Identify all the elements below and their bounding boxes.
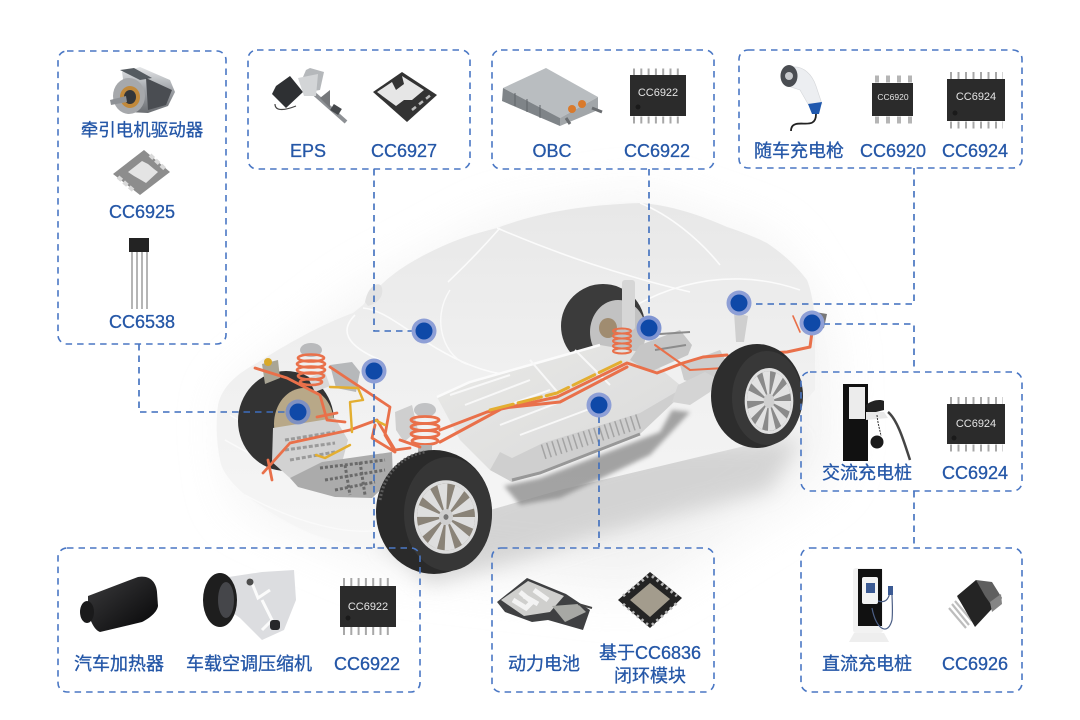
front coil spring right bbox=[411, 403, 439, 453]
icon: CC6920 chip bbox=[872, 79, 913, 120]
label: battery: 动力电池 bbox=[508, 654, 580, 674]
panel: charging gun bbox=[739, 50, 1022, 168]
chip text: CC6924 bbox=[956, 91, 996, 103]
far rear wheel bbox=[561, 284, 646, 368]
marker dots bbox=[286, 290, 824, 424]
near rear wheel bbox=[711, 344, 803, 448]
icon: battery module bbox=[497, 578, 592, 630]
label: CC6922: CC6922 bbox=[624, 141, 690, 161]
label: CC6924: CC6924 bbox=[942, 141, 1008, 161]
connector lines bbox=[139, 168, 914, 548]
icon: OBC box bbox=[502, 68, 602, 126]
label: CC6836 module: 基于CC6836 bbox=[599, 643, 701, 663]
icon: CC6925 package bbox=[113, 150, 170, 195]
label: CC6922: CC6922 bbox=[334, 654, 400, 674]
marker: compressor bbox=[362, 358, 386, 384]
panel: DC charger bbox=[801, 548, 1022, 692]
label: CC6920: CC6920 bbox=[860, 141, 926, 161]
label: AC charger: 交流充电桩 bbox=[822, 463, 912, 483]
rear subframe and motor bbox=[622, 280, 748, 405]
car body shell bbox=[217, 203, 815, 547]
label: CC6924: CC6924 bbox=[942, 463, 1008, 483]
front coil spring left bbox=[297, 343, 325, 385]
icon: CC6538 package bbox=[129, 238, 149, 309]
panel: battery bbox=[492, 548, 714, 692]
marker: OBC bbox=[636, 316, 662, 340]
icon: AC charger bbox=[843, 384, 910, 461]
label: OBC: OBC bbox=[532, 141, 572, 161]
chip text: CC6920 bbox=[877, 92, 909, 102]
chip text: CC6922 bbox=[348, 601, 388, 613]
windshield and roof outline bbox=[347, 203, 800, 375]
icon: heater bbox=[80, 577, 158, 632]
icon: DC charger bbox=[849, 568, 893, 642]
car illustration bbox=[217, 200, 830, 590]
marker: charging gun bbox=[726, 290, 752, 316]
marker: EPS bbox=[412, 318, 436, 344]
chip text: CC6922 bbox=[638, 87, 678, 99]
label: CC6926: CC6926 bbox=[942, 654, 1008, 674]
rear coil spring bbox=[613, 328, 631, 354]
icon: EPS steering bbox=[272, 68, 346, 122]
label: CC6925: CC6925 bbox=[109, 202, 175, 222]
label: CC6836 module: 闭环模块 bbox=[614, 666, 686, 686]
marker: charging port bbox=[800, 310, 824, 336]
icon: CC6927 package bbox=[373, 72, 437, 122]
chip text: CC6924 bbox=[956, 418, 996, 430]
label: charging gun: 随车充电枪 bbox=[754, 141, 844, 161]
panel: OBC bbox=[492, 50, 714, 169]
icon: CC6924 chip bbox=[947, 400, 1005, 448]
panel: traction motor driver bbox=[58, 51, 226, 344]
high-voltage cables bbox=[255, 332, 812, 480]
icon: CC6922 chip bbox=[630, 72, 686, 120]
front engine assembly bbox=[262, 358, 418, 498]
soft glow behind car bbox=[230, 200, 830, 590]
panel: AC charger bbox=[801, 372, 1022, 491]
battery pack bbox=[437, 345, 690, 505]
label: CC6538: CC6538 bbox=[109, 312, 175, 332]
icon: CC6836 package bbox=[618, 572, 682, 628]
icon: traction motor bbox=[110, 67, 175, 114]
icon: charging gun bbox=[780, 65, 822, 131]
far front wheel bbox=[238, 371, 334, 471]
ground shadow bbox=[380, 440, 800, 585]
icon: CC6924 chip bbox=[947, 76, 1005, 125]
marker: battery bbox=[586, 392, 612, 418]
label: compressor: 车载空调压缩机 bbox=[186, 654, 312, 674]
panel: EPS bbox=[248, 50, 470, 169]
icon: CC6922 chip bbox=[340, 582, 396, 631]
label: DC charger: 直流充电桩 bbox=[822, 654, 912, 674]
label: heater: 汽车加热器 bbox=[74, 654, 164, 674]
label: EPS: EPS bbox=[290, 141, 326, 161]
label: CC6927: CC6927 bbox=[371, 141, 437, 161]
icon: compressor bbox=[203, 570, 296, 640]
charging port bbox=[793, 312, 827, 332]
icon: CC6926 package bbox=[949, 580, 1002, 628]
label: CC6836 module bbox=[599, 643, 701, 686]
panel: heater and compressor bbox=[58, 548, 420, 692]
label: traction motor driver: 牵引电机驱动器 bbox=[81, 120, 203, 140]
side mirror bbox=[365, 284, 382, 306]
near front wheel bbox=[376, 450, 492, 574]
marker: traction motor bbox=[286, 400, 310, 424]
